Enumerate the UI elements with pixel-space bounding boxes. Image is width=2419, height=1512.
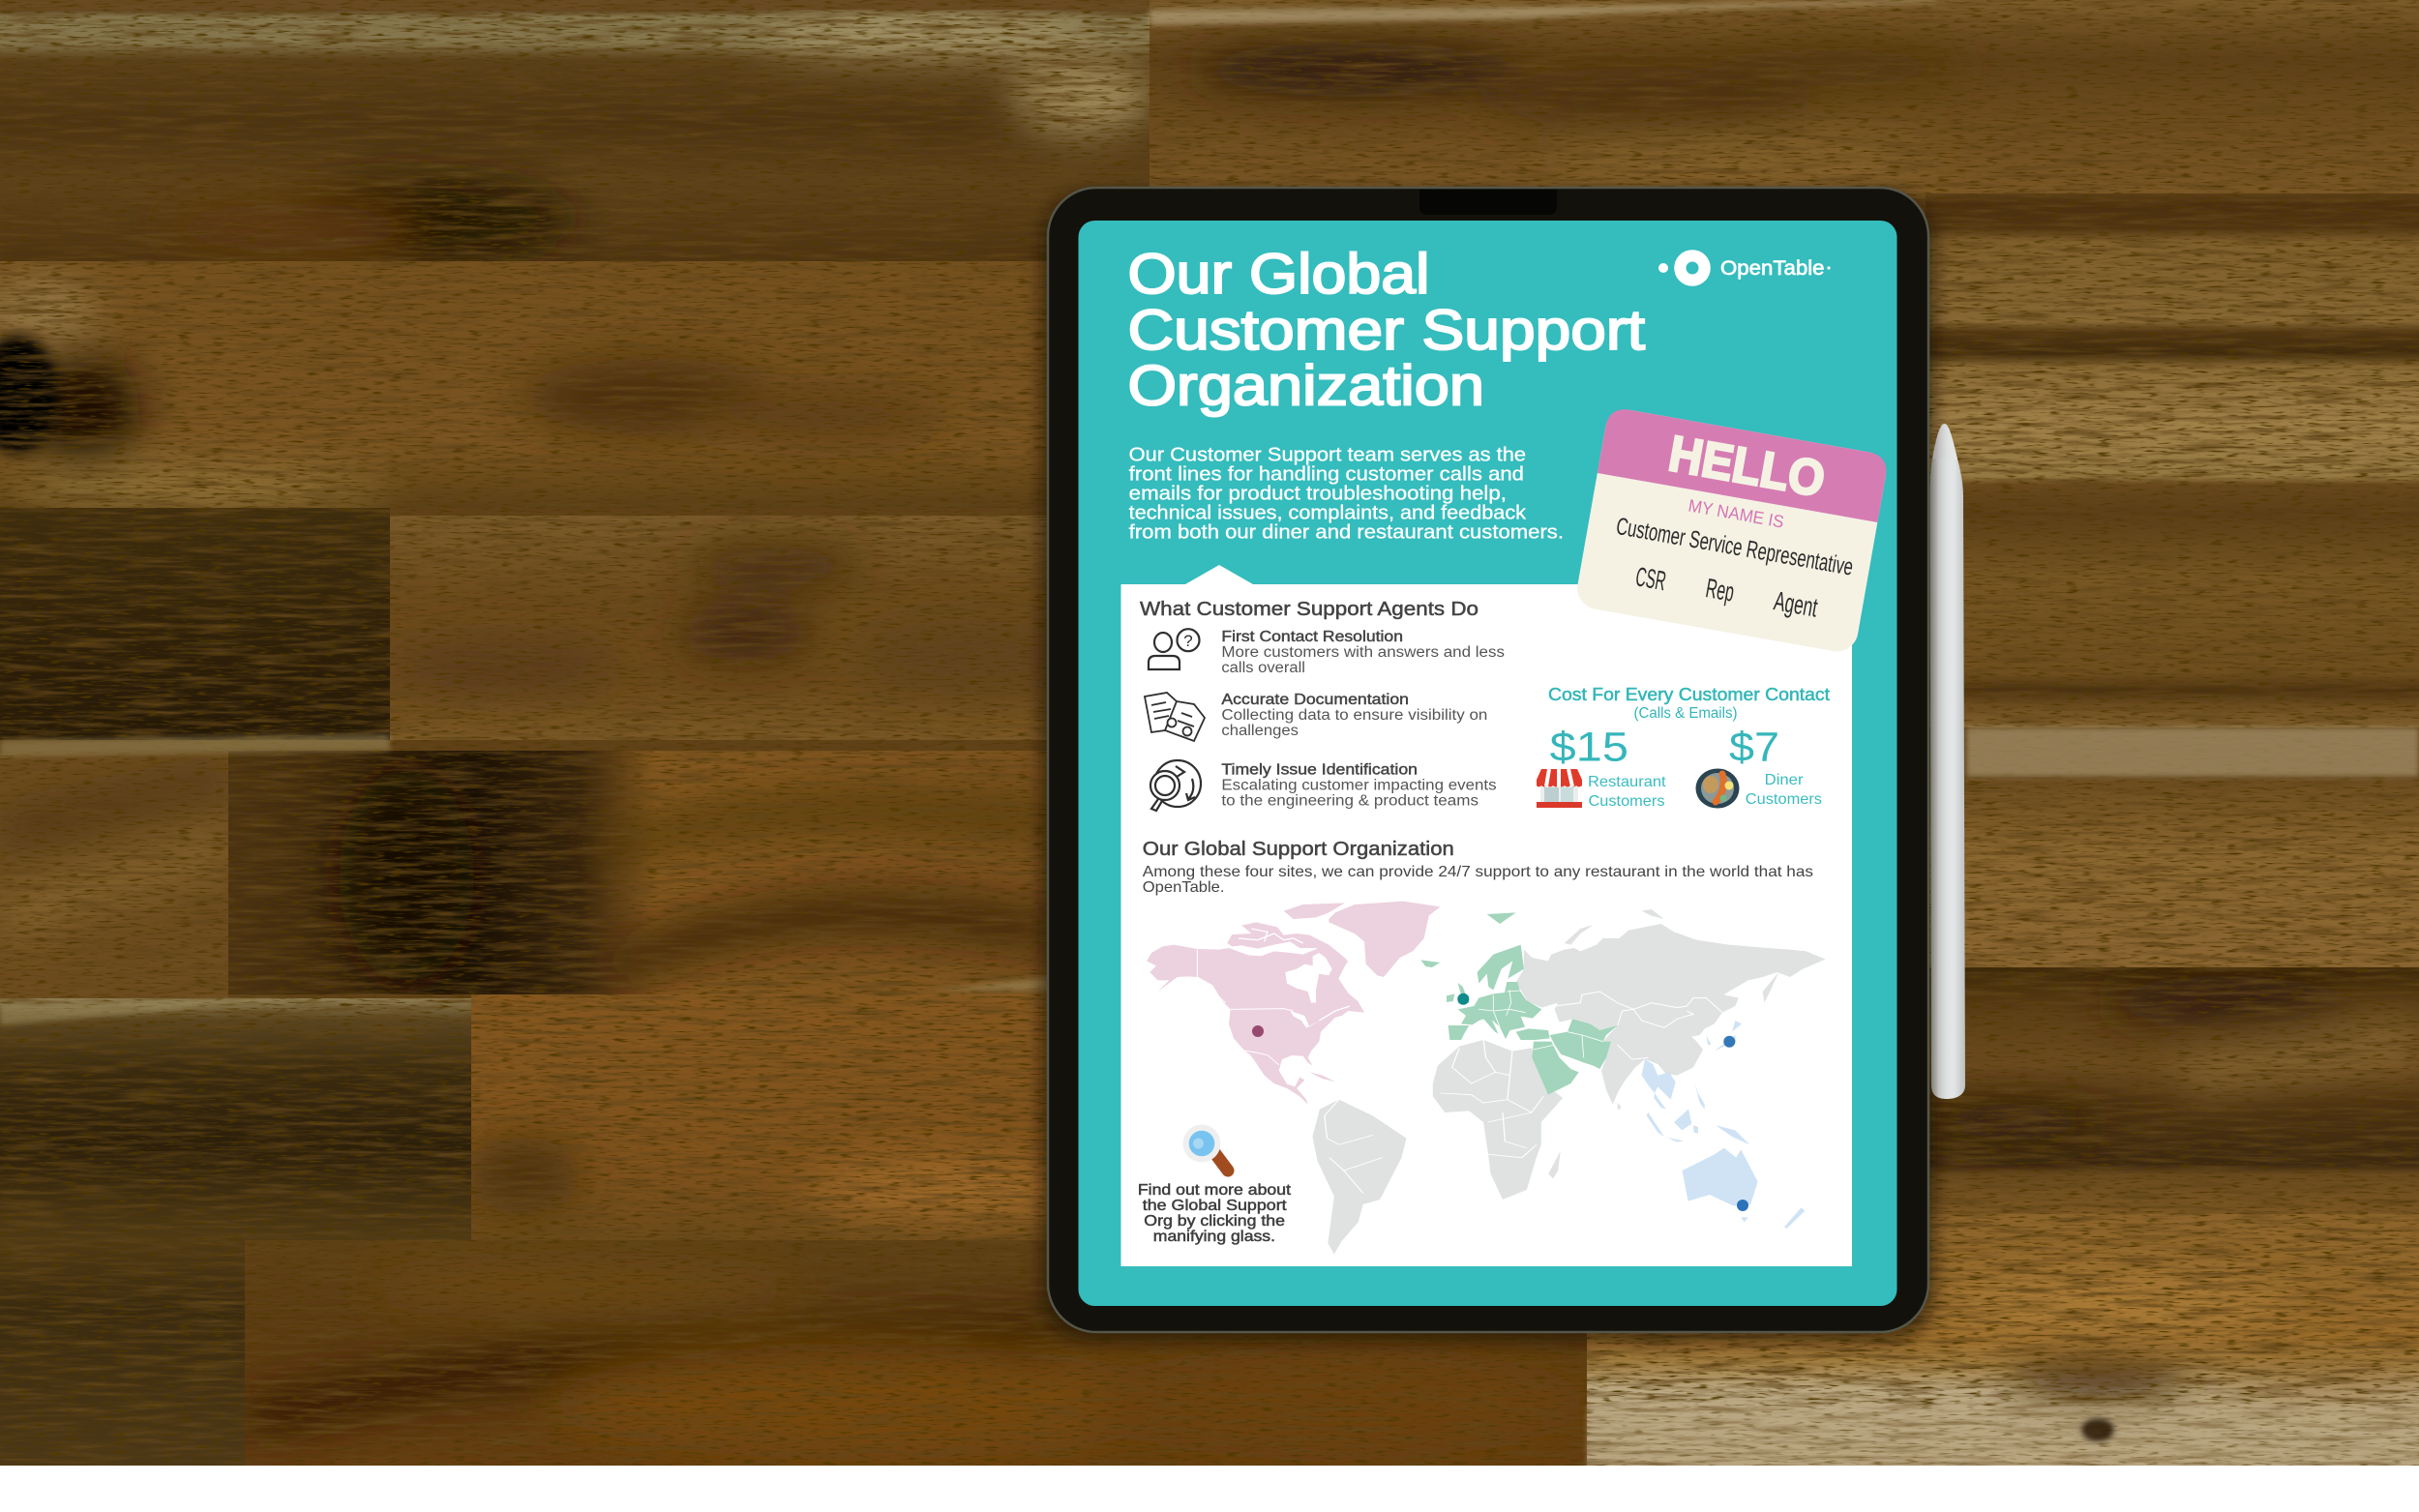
item: first contact resolution: First Contact Resolution	[1221, 629, 1403, 645]
global org heading and description: Among these four sites, we can provide 24/7 support to any restaurant in the world that has	[1143, 864, 1813, 880]
cost heading	[1548, 684, 1830, 722]
world map	[1147, 902, 1826, 1255]
teal screen	[1078, 221, 1896, 1306]
cost: restaurant	[1537, 725, 1666, 810]
intro text: front lines for handling customer calls and	[1129, 463, 1524, 486]
map callout text	[1138, 1182, 1292, 1245]
intro text	[1129, 444, 1564, 544]
icon: magnifier with cycle	[1150, 760, 1201, 811]
hello name tag: Rep	[1704, 573, 1737, 608]
site marker: USA	[1252, 1025, 1264, 1037]
cost: restaurant: Restaurant	[1588, 774, 1666, 790]
item: accurate documentation	[1221, 692, 1487, 739]
camera notch	[1419, 190, 1557, 215]
icon: person with question: ?	[1183, 632, 1193, 650]
map callout text: the Global Support	[1143, 1198, 1287, 1214]
white content panel	[1120, 565, 1852, 1266]
item: timely issue identification: Escalating customer impacting events	[1221, 778, 1497, 794]
icon: magnifying glass	[1182, 1124, 1228, 1171]
map callout text: manifying glass.	[1153, 1229, 1275, 1245]
title: Organization	[1128, 355, 1484, 418]
item: accurate documentation: challenges	[1221, 723, 1299, 739]
item: timely issue identification	[1221, 762, 1497, 810]
item: first contact resolution: More customers with answers and less	[1221, 644, 1505, 661]
site marker: UK	[1457, 993, 1469, 1005]
apple pencil	[1929, 424, 1965, 1099]
north america	[1147, 902, 1440, 1105]
item: first contact resolution: calls overall	[1221, 660, 1305, 676]
global org heading and description: OpenTable.	[1143, 879, 1225, 896]
global org heading and description	[1143, 839, 1813, 896]
hello name tag: Customer Service Representative	[1614, 513, 1855, 581]
south america, africa, australia (grey + blue)	[1312, 1040, 1805, 1255]
site marker: Australia	[1737, 1200, 1748, 1211]
global org heading and description: Our Global Support Organization	[1143, 839, 1454, 860]
cost: diner: Diner	[1765, 772, 1804, 788]
cost: diner	[1695, 725, 1822, 809]
hello name tag: Agent	[1772, 585, 1820, 623]
intro text: emails for product troubleshooting help,	[1129, 483, 1507, 505]
eurasia	[1420, 909, 1826, 1144]
cost: restaurant: $15	[1550, 725, 1628, 771]
site marker: Japan	[1723, 1036, 1735, 1048]
cost heading: Cost For Every Customer Contact	[1548, 684, 1830, 704]
title: Our Global	[1128, 243, 1430, 306]
title	[1128, 243, 1645, 418]
map callout text: Org by clicking the	[1144, 1213, 1285, 1230]
cost: diner: $7	[1729, 725, 1779, 771]
icon: storefront	[1537, 769, 1582, 808]
hello name tag: MY NAME IS	[1687, 496, 1785, 532]
cost: diner: Customers	[1746, 791, 1822, 808]
section heading: what agents do: What Customer Support Agents Do	[1140, 599, 1478, 620]
title: Customer Support	[1128, 299, 1645, 362]
europe and middle east	[1478, 945, 1524, 990]
southeast asia and japan	[1642, 1021, 1749, 1144]
OpenTable logo: OpenTable	[1720, 256, 1825, 280]
hello name tag: HELLO	[1664, 426, 1829, 508]
intro text: from both our diner and restaurant customers.	[1129, 521, 1564, 544]
intro text: Our Customer Support team serves as the	[1129, 444, 1526, 466]
item: timely issue identification: to the engineering & product teams	[1221, 793, 1478, 810]
item: timely issue identification: Timely Issue Identification	[1221, 762, 1418, 779]
cost: restaurant: Customers	[1589, 793, 1664, 810]
hello name tag	[1574, 406, 1890, 655]
map callout text: Find out more about	[1138, 1182, 1292, 1199]
white strip below photo	[0, 1466, 2419, 1512]
cost heading: (Calls & Emails)	[1633, 705, 1738, 722]
intro text: technical issues, complaints, and feedback	[1129, 502, 1527, 524]
icon: person with question	[1149, 629, 1200, 669]
icon: plate	[1695, 768, 1740, 809]
icon: documents	[1145, 693, 1205, 741]
item: first contact resolution	[1221, 629, 1505, 676]
tablet	[1040, 188, 1935, 1343]
item: accurate documentation: Collecting data to ensure visibility on	[1221, 707, 1487, 724]
OpenTable logo	[1658, 250, 1831, 286]
item: accurate documentation: Accurate Documentation	[1221, 692, 1409, 708]
hello name tag: CSR	[1633, 561, 1668, 596]
